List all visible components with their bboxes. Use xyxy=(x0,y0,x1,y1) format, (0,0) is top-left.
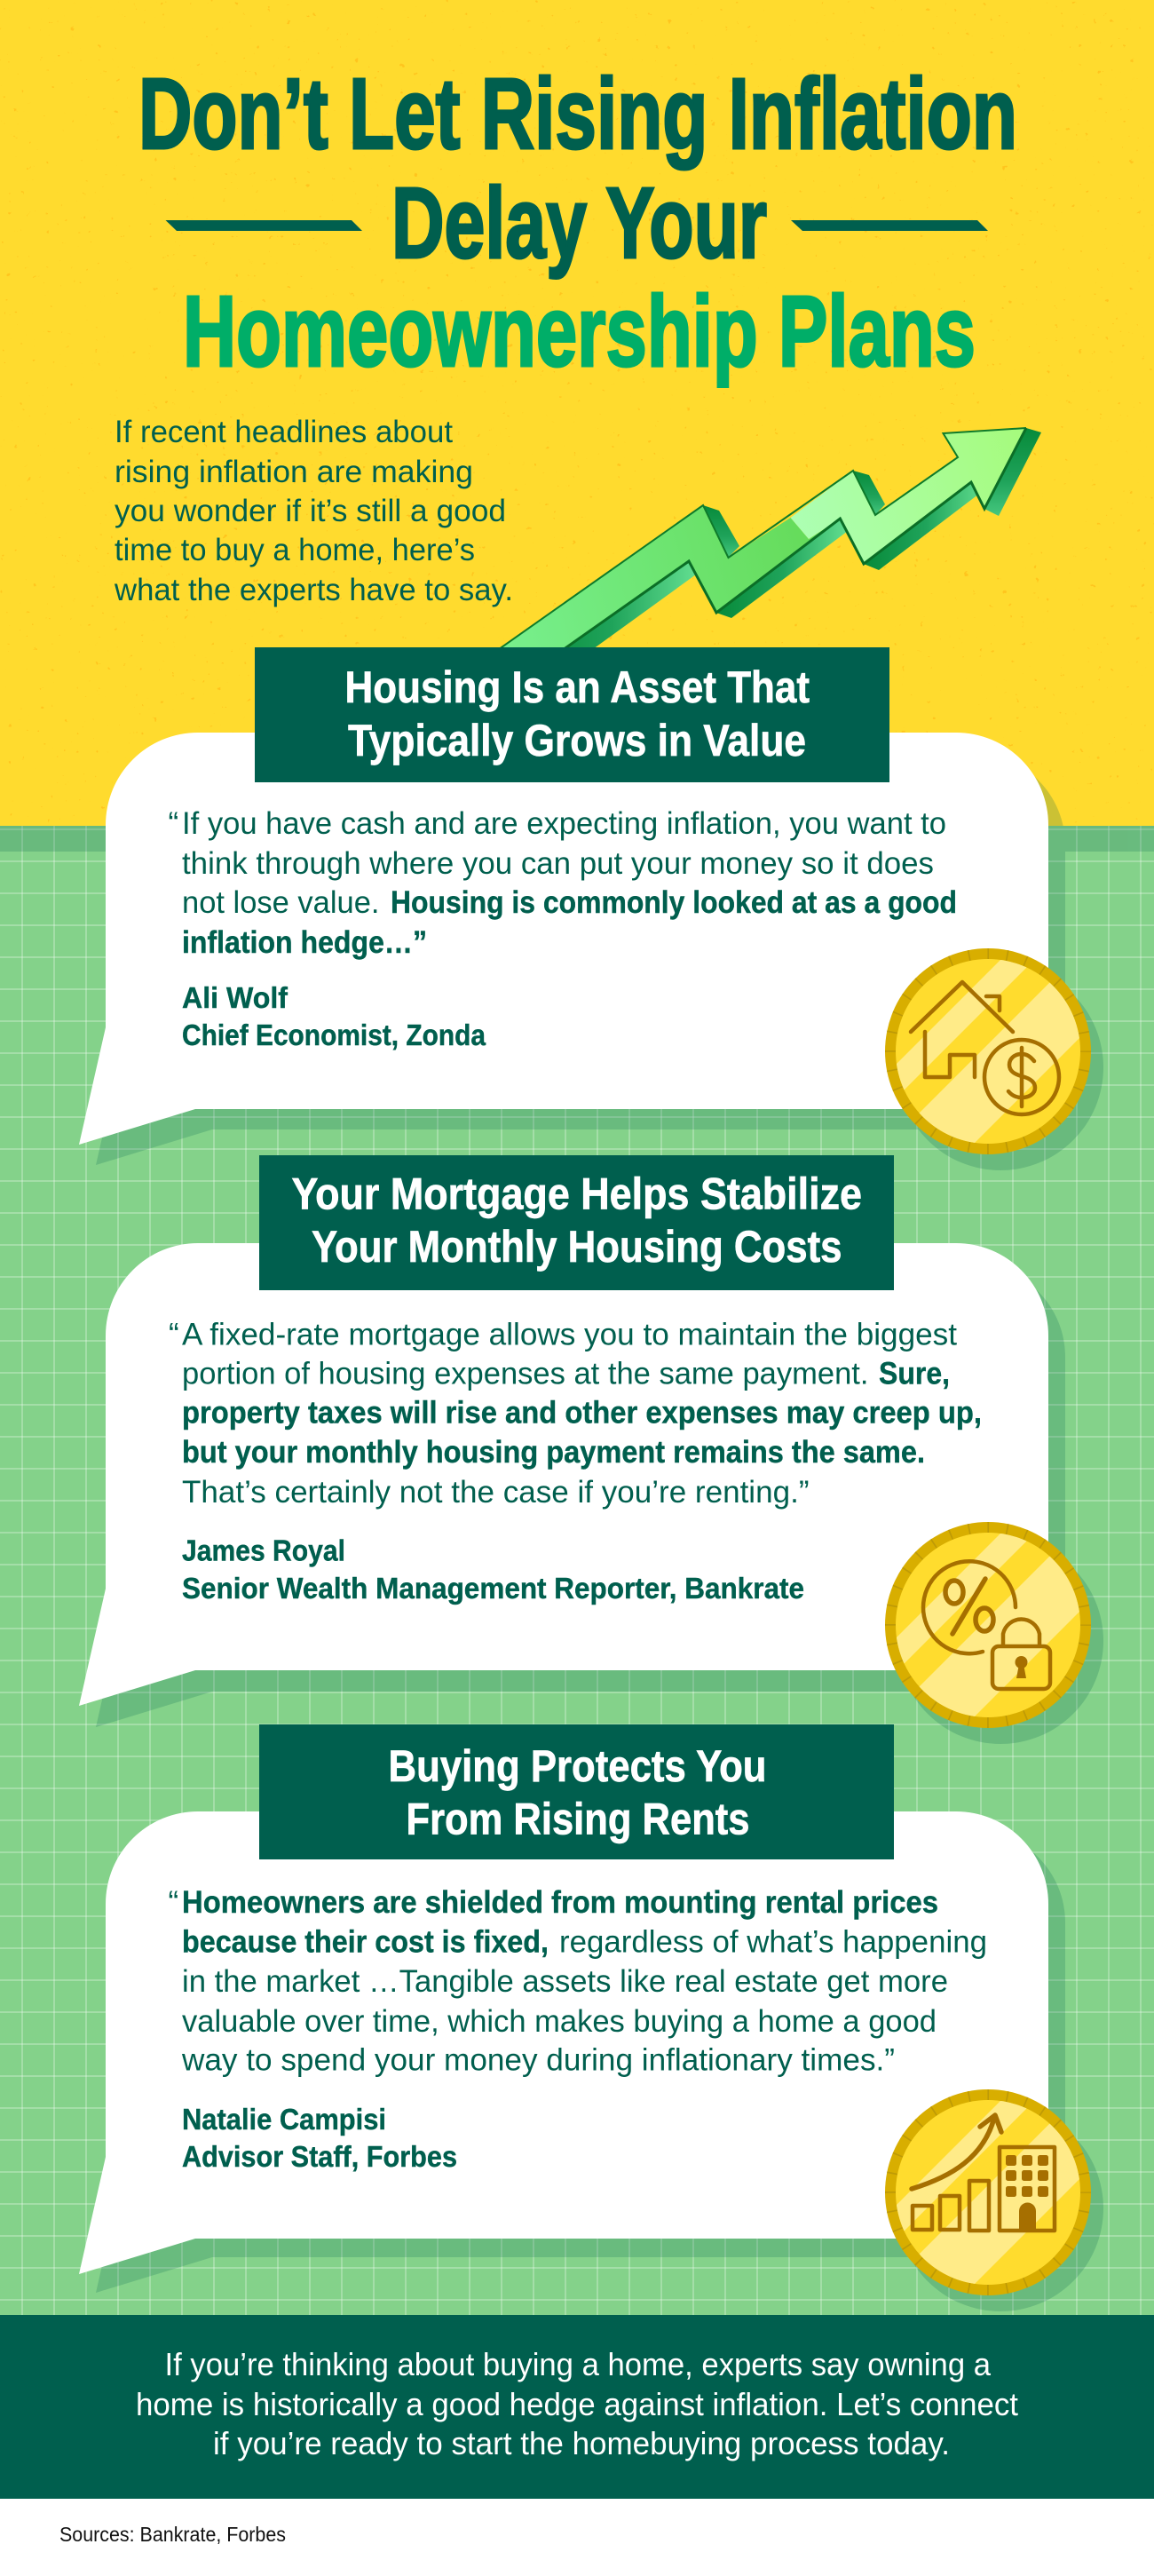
intro text xyxy=(114,415,513,607)
right dash xyxy=(791,220,988,231)
author xyxy=(182,2103,457,2173)
icon: coin with growth bars and building xyxy=(815,2019,1154,2365)
quote text: If you have cash and are expecting inflation, you want to xyxy=(182,806,946,841)
heading banner: Typically Grows in Value xyxy=(348,716,806,765)
heading banner: Your Mortgage Helps Stabilize xyxy=(291,1169,862,1218)
heading banner: Housing Is an Asset That xyxy=(344,662,810,712)
panel: housing is an asset xyxy=(79,647,1154,1224)
quote text: Sure, xyxy=(879,1357,950,1391)
quote text: portion of housing expenses at the same payment. xyxy=(182,1357,868,1391)
intro text: you wonder if it’s still a good xyxy=(115,494,506,528)
quote text xyxy=(169,1885,987,2078)
author: Chief Economist, Zonda xyxy=(182,1019,486,1051)
speech bubble xyxy=(79,1243,1048,1706)
green grid background xyxy=(0,826,1154,2315)
quote text: in the market …Tangible assets like real estate get more xyxy=(182,1964,948,1999)
footer call to action: home is historically a good hedge against inflation. Let’s connect xyxy=(136,2386,1018,2422)
quote text: Housing is commonly looked at as a good xyxy=(391,885,957,920)
heading banner xyxy=(259,1155,894,1290)
panel: buying protects from rents xyxy=(79,1724,1154,2365)
footer call to action xyxy=(0,2315,1154,2499)
heading banner: Your Monthly Housing Costs xyxy=(312,1222,842,1272)
quote text: inflation hedge…” xyxy=(182,925,427,960)
shadows of header, bubbles and coins xyxy=(0,753,1154,2311)
author: Advisor Staff, Forbes xyxy=(182,2140,457,2173)
quote text: because their cost is fixed, xyxy=(182,1925,549,1959)
intro text: If recent headlines about xyxy=(115,415,453,449)
quote text: property taxes will rise and other expenses may creep up, xyxy=(182,1396,982,1430)
quote text: way to spend your money during inflationary times.” xyxy=(181,2042,895,2078)
author: Natalie Campisi xyxy=(182,2103,386,2136)
quote text: think through where you can put your money so it does xyxy=(182,846,934,881)
intro text: time to buy a home, here’s xyxy=(115,533,475,567)
quote text: “ xyxy=(169,806,178,841)
left dash xyxy=(165,220,362,231)
intro text: rising inflation are making xyxy=(115,455,473,489)
quote text: but your monthly housing payment remains the same. xyxy=(182,1435,925,1470)
intro text: what the experts have to say. xyxy=(114,573,513,607)
icon: coin with house and dollar xyxy=(815,879,1154,1224)
heading banner: From Rising Rents xyxy=(407,1794,749,1843)
title line 2: Delay Your xyxy=(391,167,767,279)
title xyxy=(138,58,1017,387)
footer call to action: If you’re thinking about buying a home, experts say owning a xyxy=(165,2346,992,2382)
heading banner xyxy=(255,647,889,782)
author xyxy=(182,1534,804,1605)
quote text xyxy=(169,806,957,960)
sources: Sources: Bankrate, Forbes xyxy=(59,2523,286,2546)
quote text: regardless of what’s happening xyxy=(559,1925,987,1959)
quote text: A fixed-rate mortgage allows you to maintain the biggest xyxy=(182,1318,957,1351)
quote text: valuable over time, which makes buying a home a good xyxy=(182,2004,937,2039)
author xyxy=(182,981,486,1051)
quote text: “ xyxy=(169,1885,178,1920)
quote text xyxy=(169,1318,982,1510)
quote text: “ xyxy=(169,1318,179,1351)
heading banner xyxy=(259,1724,894,1859)
author: Senior Wealth Management Reporter, Bankrate xyxy=(182,1572,804,1605)
quote text: Homeowners are shielded from mounting rental prices xyxy=(182,1885,938,1920)
icon: rising green arrow xyxy=(462,428,1041,675)
footer call to action: if you’re ready to start the homebuying process today. xyxy=(213,2425,950,2461)
icon: coin with percent and lock xyxy=(815,1453,1154,1797)
quote text: not lose value. xyxy=(182,885,380,920)
author: James Royal xyxy=(182,1534,345,1566)
speech bubble xyxy=(79,733,1048,1145)
speech bubble xyxy=(79,1811,1048,2274)
heading banner: Buying Protects You xyxy=(389,1741,767,1791)
yellow header background xyxy=(0,0,1154,835)
quote text: That’s certainly not the case if you’re renting.” xyxy=(182,1475,810,1510)
author: Ali Wolf xyxy=(182,981,288,1014)
panel: mortgage stabilizes costs xyxy=(79,1155,1154,1797)
